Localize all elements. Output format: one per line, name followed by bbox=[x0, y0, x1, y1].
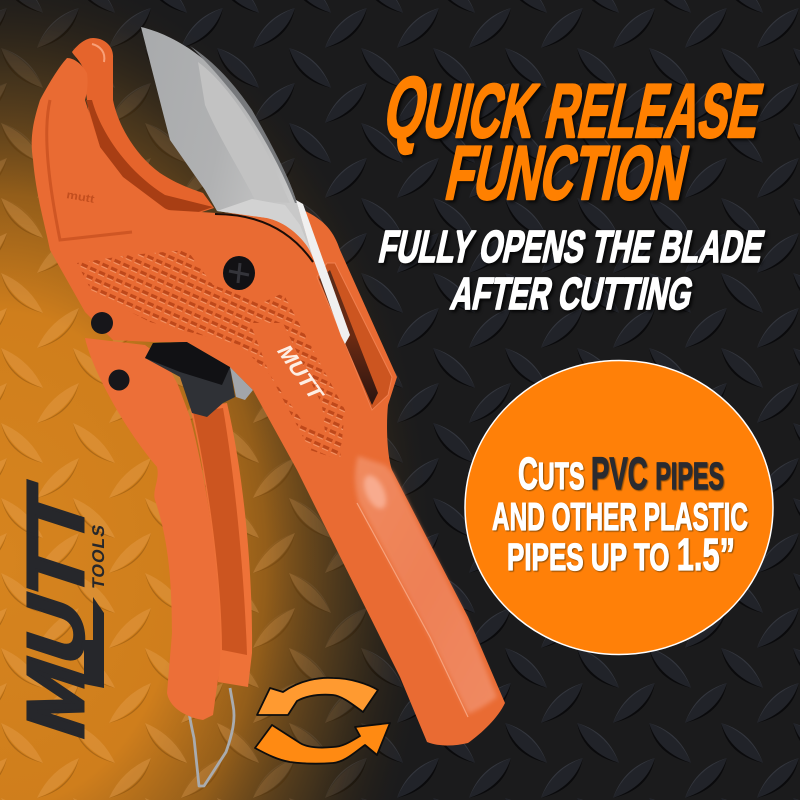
main body and handle bbox=[32, 58, 505, 746]
wire spring bbox=[188, 688, 234, 786]
screw bbox=[223, 256, 255, 290]
etched mark: mutt bbox=[66, 188, 95, 206]
metal latch bbox=[230, 367, 253, 400]
logo panel bbox=[250, 323, 325, 432]
handle ridge line bbox=[357, 503, 468, 717]
logo tools text: TOOLS bbox=[88, 522, 108, 591]
callout text: PIPES UP TO 1.5” bbox=[507, 529, 735, 580]
handle highlight bbox=[359, 472, 391, 512]
jaw groove bbox=[47, 100, 132, 240]
brand logo: MUTT bbox=[12, 475, 101, 749]
callout text: CUTS PVC PIPES bbox=[518, 448, 724, 499]
callout text bbox=[492, 448, 748, 580]
arrow bottom bbox=[255, 723, 390, 764]
blade bbox=[141, 27, 350, 344]
heading: quick release function bbox=[377, 60, 771, 216]
pipe cutter tool bbox=[32, 27, 505, 786]
black release lever bbox=[145, 342, 235, 417]
subheading bbox=[375, 221, 769, 319]
black lever top bbox=[145, 342, 230, 385]
rivet lower bbox=[108, 370, 130, 390]
tool logo text: MUTT bbox=[271, 343, 328, 403]
rivet bbox=[91, 312, 113, 334]
swap arrows bbox=[255, 678, 390, 764]
grip texture bbox=[77, 250, 345, 460]
arrow top bbox=[257, 678, 378, 715]
callout circle bbox=[465, 360, 773, 654]
body slot bbox=[317, 263, 392, 410]
rear jaw bbox=[72, 38, 214, 216]
handle light face bbox=[355, 456, 497, 714]
front grip lever bbox=[85, 338, 220, 720]
rear grip lever bbox=[190, 403, 252, 687]
